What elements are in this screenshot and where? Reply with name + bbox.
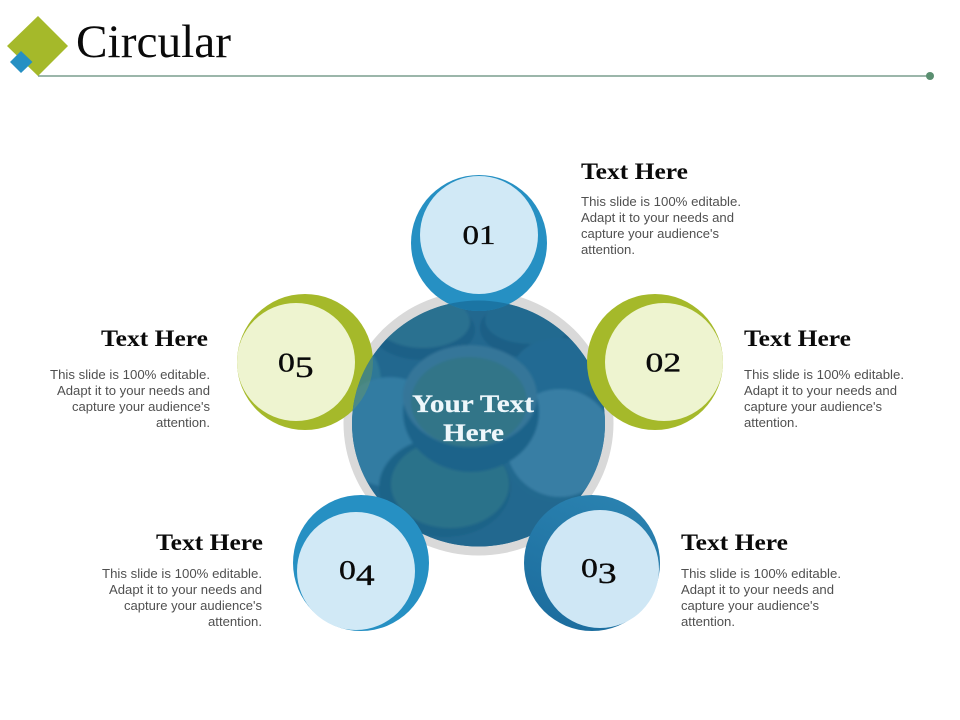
ring: 02 green	[587, 294, 723, 430]
text block 02: This slide is 100% editable.	[744, 368, 904, 382]
text block 03: capture your audience's	[681, 599, 819, 613]
node 04: 0	[339, 555, 356, 585]
text block 05: Adapt it to your needs and	[57, 384, 210, 398]
node 05: 5	[295, 351, 314, 384]
text block 01: This slide is 100% editable.	[581, 195, 741, 209]
node 02: 02	[646, 348, 681, 377]
ring: 04 blue	[293, 495, 429, 631]
text block 01	[581, 159, 741, 257]
text block 03: This slide is 100% editable.	[681, 567, 841, 581]
centre label	[412, 391, 535, 447]
node 03: 0	[581, 553, 598, 583]
header	[7, 16, 934, 80]
text block 05: attention.	[156, 416, 210, 430]
text block 05: This slide is 100% editable.	[50, 368, 210, 382]
node 03: 3	[598, 557, 617, 590]
coin photo, tinted	[352, 304, 605, 546]
text block 01: Adapt it to your needs and	[581, 211, 734, 225]
text block 04	[102, 530, 263, 629]
centre label: Here	[443, 420, 504, 447]
text block 01: attention.	[581, 243, 635, 257]
title: Circular	[76, 16, 231, 68]
ring: 03 blue	[524, 495, 660, 631]
text block 05	[50, 326, 210, 430]
text block 04: This slide is 100% editable.	[102, 567, 262, 581]
icon: small blue diamond	[10, 51, 32, 73]
centre circle with coin photo	[352, 304, 605, 546]
node 02	[605, 303, 723, 421]
node 05	[237, 303, 355, 421]
node 01	[420, 176, 538, 294]
icon: green diamond	[7, 16, 68, 76]
text block 03: Text Here	[681, 530, 788, 555]
text block 01: capture your audience's	[581, 227, 719, 241]
text block 05: Text Here	[101, 326, 208, 351]
text block 02: attention.	[744, 416, 798, 430]
green ring showing through the centre	[352, 356, 373, 410]
text block 04: Text Here	[156, 530, 263, 555]
node 04: 4	[356, 559, 375, 592]
text block 02: Adapt it to your needs and	[744, 384, 897, 398]
centre label: Your Text	[412, 391, 535, 418]
grey ring behind centre	[344, 290, 614, 556]
node 03	[541, 510, 659, 628]
text block 02: capture your audience's	[744, 400, 882, 414]
text block 04: attention.	[208, 615, 262, 629]
text block 03: attention.	[681, 615, 735, 629]
ring: 01 blue	[411, 175, 547, 311]
text block 05: capture your audience's	[72, 400, 210, 414]
node 01: 01	[462, 220, 495, 250]
text block 03: Adapt it to your needs and	[681, 583, 834, 597]
text block 02: Text Here	[744, 326, 851, 351]
text block 04: Adapt it to your needs and	[109, 583, 262, 597]
text block 02	[744, 326, 904, 430]
node 04	[297, 512, 415, 630]
ring: 05 green	[237, 294, 373, 430]
text block 04: capture your audience's	[124, 599, 262, 613]
text block 01: Text Here	[581, 159, 688, 184]
text block 03	[681, 530, 841, 629]
node 05: 0	[278, 348, 295, 378]
header rule with end dot	[38, 72, 934, 80]
